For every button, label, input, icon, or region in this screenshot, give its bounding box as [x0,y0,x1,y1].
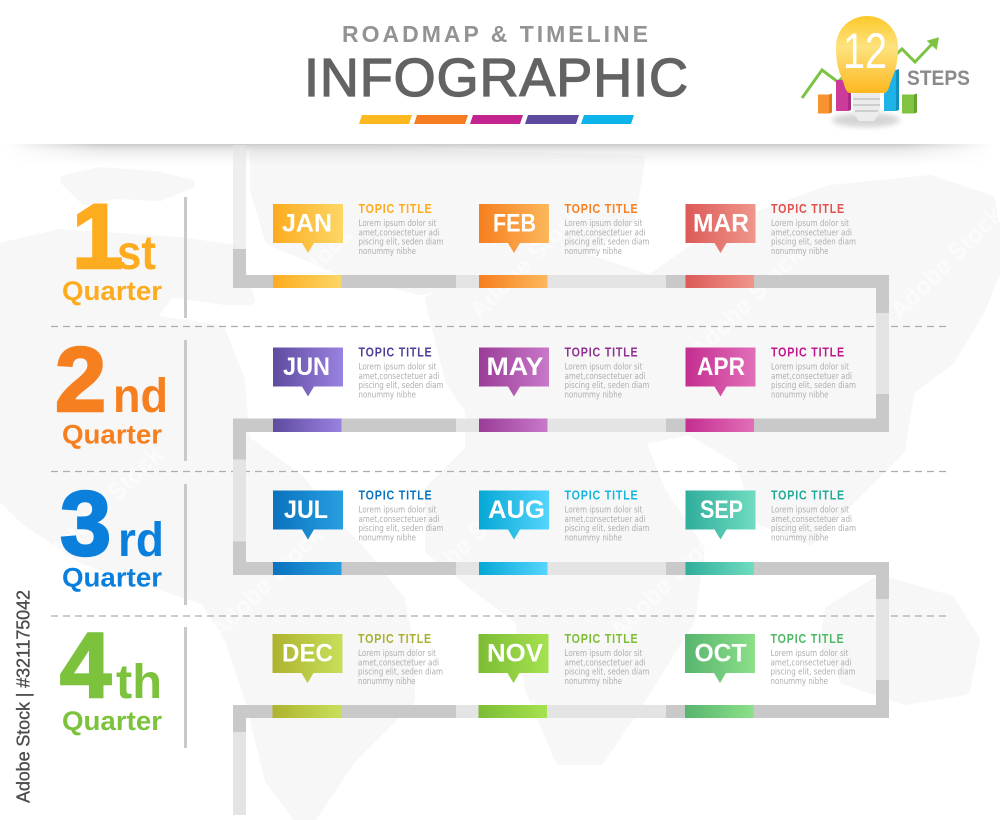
panel: 1st quarter label: st [117,227,156,280]
panel: 4th quarter label: Quarter [62,706,162,736]
panel: November: TOPIC TITLE [564,631,638,646]
panel: August: nonummy nibhe [564,533,622,543]
panel: October: piscing elit, seden diam [770,668,856,678]
watermarks: Adobe Stock [685,691,808,814]
watermarks: Adobe Stock [685,241,808,364]
panel: March: TOPIC TITLE [771,201,845,216]
panel: 1st quarter label: 1 [72,186,123,288]
panel: August [479,488,650,575]
panel: May: TOPIC TITLE [564,344,638,360]
serpentine timeline path [233,145,889,815]
panel: 3rd quarter label: 3 [60,473,111,575]
panel: October: OCT [694,640,746,668]
panel: March: MAR [693,210,749,238]
watermarks: Adobe Stock [205,521,328,644]
panel: April: nonummy nibhe [771,390,829,400]
panel: 3rd quarter label [60,473,187,605]
panel: 4th quarter label [60,615,187,748]
panel: October: amet,consectetuer adi [770,658,852,668]
panel: August: TOPIC TITLE [564,488,638,502]
panel: May: Lorem ipsum dolor sit [564,362,643,372]
panel: May: piscing elit, seden diam [564,381,650,391]
panel: November: amet,consectetuer adi [564,658,646,668]
panel: October [685,631,856,718]
panel: October: nonummy nibhe [770,677,828,687]
panel: April: APR [697,353,745,381]
panel: 3rd quarter label: rd [118,514,164,567]
panel: November: nonummy nibhe [564,677,622,687]
panel: June: Lorem ipsum dolor sit [358,362,437,372]
panel: May: amet,consectetuer adi [564,372,646,382]
panel: April [686,344,856,432]
panel: July: JUL [284,496,328,524]
panel: January: piscing elit, seden diam [358,238,444,248]
icon: 12 steps lightbulb with chart: 12 [843,23,887,79]
panel: January: amet,consectetuer adi [358,228,440,238]
panel: December: TOPIC TITLE [358,631,432,646]
panel: December: piscing elit, seden diam [358,668,443,678]
panel: June: piscing elit, seden diam [358,381,444,391]
stock id caption: Adobe Stock | #321175042 [14,590,34,803]
panel: September: piscing elit, seden diam [771,524,856,534]
panel: July: amet,consectetuer adi [358,515,440,525]
panel: February: TOPIC TITLE [564,201,638,216]
watermarks: Adobe Stock [405,481,528,604]
panel: December [272,631,443,718]
panel: 2nd quarter label: Quarter [62,420,162,450]
icon: 12 steps lightbulb with chart: STEPS [907,67,970,90]
panel: January: JAN [282,210,332,238]
panel: 1st quarter label: Quarter [62,276,162,306]
panel: May [479,344,650,432]
panel: March: amet,consectetuer adi [771,228,852,238]
panel: July: Lorem ipsum dolor sit [358,506,437,516]
panel: April: Lorem ipsum dolor sit [771,362,849,372]
panel: February: FEB [493,210,536,238]
panel: May: nonummy nibhe [564,390,622,400]
watermarks: Adobe Stock [425,691,548,814]
panel: March: nonummy nibhe [771,247,829,257]
panel: 4th quarter label: 4 [60,615,111,717]
watermarks: Adobe Stock [45,441,168,564]
panel: August: Lorem ipsum dolor sit [564,506,643,516]
panel: December: Lorem ipsum dolor sit [358,649,436,659]
panel: September: nonummy nibhe [771,533,829,543]
panel: February [479,201,650,288]
panel: August: amet,consectetuer adi [564,515,646,525]
panel: 2nd quarter label: 2 [55,329,106,431]
panel: October: TOPIC TITLE [770,631,844,646]
panel: April: TOPIC TITLE [771,344,845,360]
icon: 12 steps lightbulb with chart [802,16,970,127]
panel: June: nonummy nibhe [358,390,416,400]
panel: June: TOPIC TITLE [358,344,432,360]
panel: March: piscing elit, seden diam [771,238,856,248]
panel: July [273,488,444,575]
panel: January: Lorem ipsum dolor sit [358,219,437,229]
panel: August: piscing elit, seden diam [564,524,650,534]
panel: December: amet,consectetuer adi [358,658,439,668]
panel: December: DEC [282,640,333,668]
panel: July: piscing elit, seden diam [358,524,444,534]
panel: June [273,344,444,432]
panel: November: Lorem ipsum dolor sit [564,649,643,659]
panel: February: nonummy nibhe [564,247,622,257]
panel: July: nonummy nibhe [358,533,416,543]
panel: 2nd quarter label: nd [113,370,168,423]
watermarks: Adobe Stock [235,221,358,344]
panel: September: SEP [700,496,743,524]
panel: 4th quarter label: th [116,656,162,709]
panel: April: amet,consectetuer adi [771,372,852,382]
panel: January [273,201,444,288]
panel: March: Lorem ipsum dolor sit [771,219,849,229]
panel: April: piscing elit, seden diam [771,381,856,391]
panel: January: TOPIC TITLE [358,201,432,216]
panel: May: MAY [486,353,544,381]
title: INFOGRAPHIC [304,48,688,108]
panel: September: amet,consectetuer adi [771,515,852,525]
header band [0,0,1000,166]
panel: February: piscing elit, seden diam [564,238,650,248]
panel: 3rd quarter label: Quarter [62,562,162,592]
panel: July: TOPIC TITLE [358,488,432,502]
panel: February: amet,consectetuer adi [564,228,646,238]
panel: December: nonummy nibhe [358,677,416,687]
panel: September: Lorem ipsum dolor sit [771,506,849,516]
panel: March [686,201,856,288]
panel: September: TOPIC TITLE [771,488,845,502]
watermarks [45,201,1000,814]
panel: November: piscing elit, seden diam [564,668,650,678]
panel: June: amet,consectetuer adi [358,372,440,382]
subtitle: ROADMAP & TIMELINE [342,21,648,47]
panel: February: Lorem ipsum dolor sit [564,219,643,229]
panel: September [686,488,856,575]
colour bars under title [359,115,634,124]
panel: August: AUG [488,496,545,524]
panel: October: Lorem ipsum dolor sit [770,649,849,659]
watermarks: Adobe Stock [605,521,728,644]
dashed dividers [51,326,951,616]
panel: November [478,631,650,718]
panel: January: nonummy nibhe [358,247,416,257]
watermarks: Adobe Stock [465,201,588,324]
panel: June: JUN [283,353,330,381]
watermarks: Adobe Stock [825,461,948,584]
panel: 1st quarter label [62,186,187,318]
panel: November: NOV [487,640,543,668]
panel: 2nd quarter label [55,329,187,461]
